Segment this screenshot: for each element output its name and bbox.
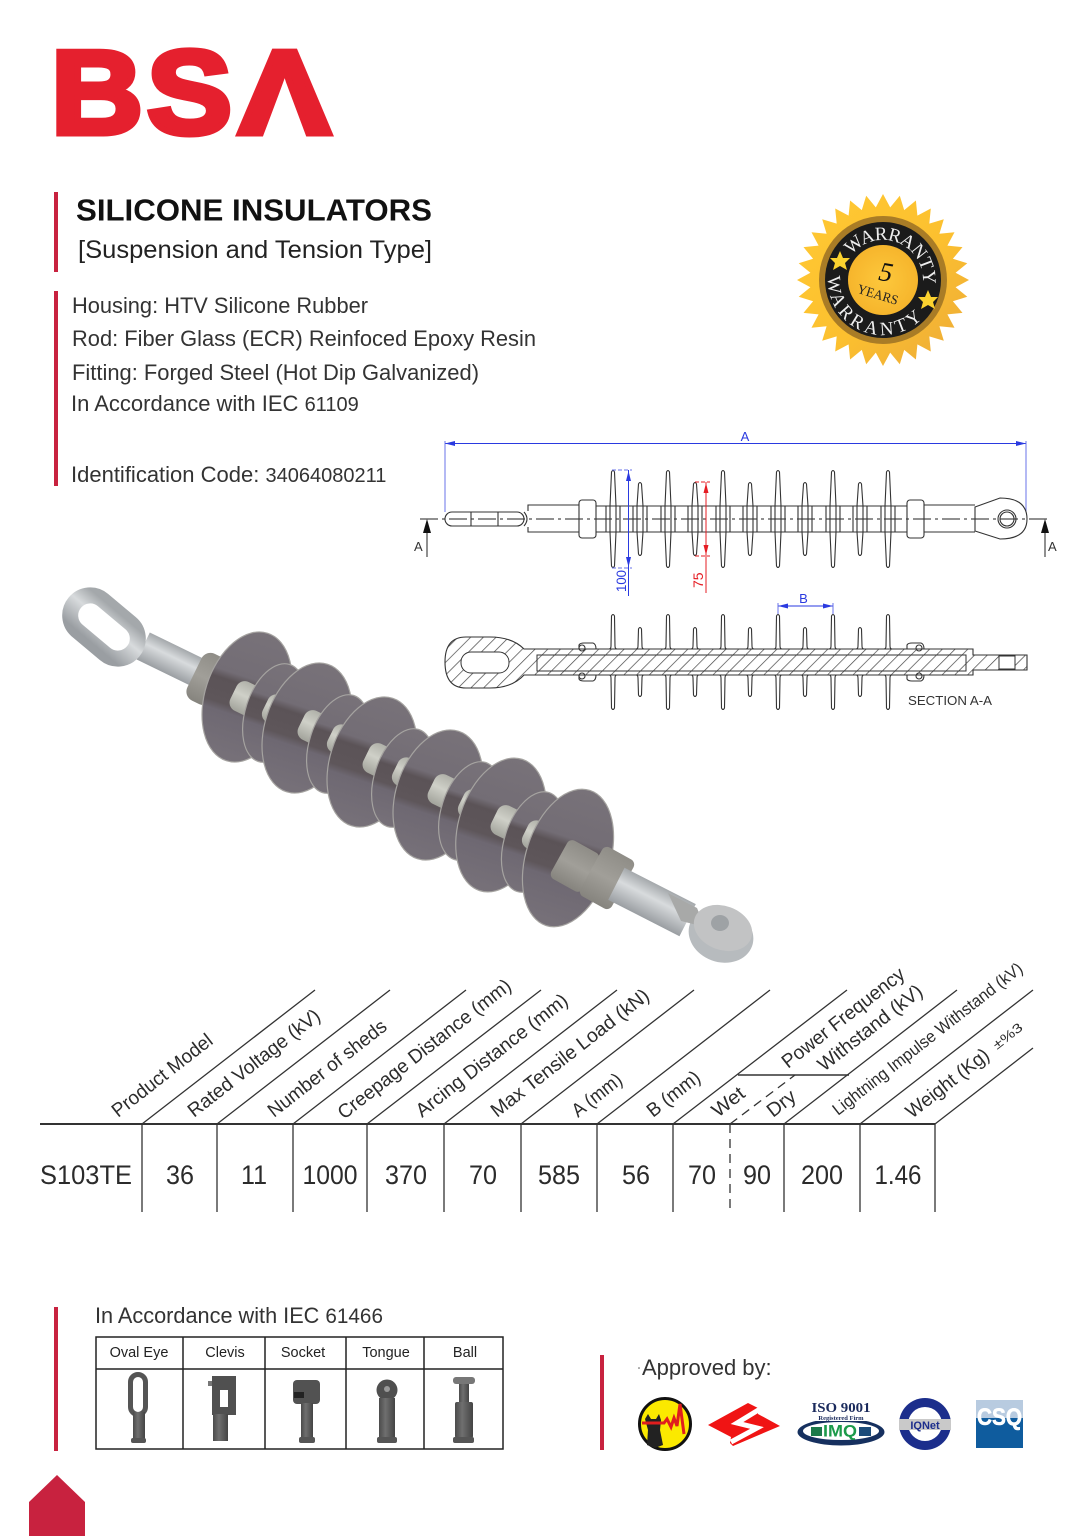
rotated column headers: Power Frequency	[778, 963, 909, 1073]
fittings labels: Oval Eye	[110, 1345, 168, 1361]
fittings labels: Tongue	[362, 1345, 410, 1361]
end collar and clevis eye	[549, 838, 761, 972]
rotated column headers: ±%3	[990, 1020, 1026, 1052]
warranty seal badge: WARRANTY	[828, 275, 920, 336]
fittings labels	[110, 1345, 477, 1361]
dimension 75: 75	[690, 572, 706, 588]
specification text block: Identification Code: 34064080211	[71, 462, 386, 487]
logo: IQNet: IQNet	[910, 1420, 940, 1432]
rotated column headers: Arcing Distance (mm)	[412, 989, 572, 1122]
fittings labels: Clevis	[205, 1345, 245, 1361]
technical drawing: side view	[414, 429, 1057, 596]
rotated column headers: Creepage Distance (mm)	[334, 975, 516, 1124]
logo: BSA: Λ	[239, 26, 330, 160]
page marker: red house shape	[29, 1475, 85, 1536]
table values	[40, 1160, 922, 1190]
heading block	[54, 192, 432, 272]
panel: fitting types	[54, 1303, 503, 1451]
logo: IQNet	[899, 1398, 951, 1450]
table values: S103TE	[40, 1160, 132, 1190]
heading block: [Suspension and Tension Type]	[78, 236, 432, 264]
section arrows A: A	[1048, 539, 1057, 554]
technical drawing: section A-A	[445, 591, 1027, 710]
warranty seal badge: YEARS	[856, 281, 900, 308]
warranty seal badge: 5	[877, 256, 895, 288]
rotated column headers: B (mm)	[643, 1066, 705, 1122]
panel: approvals	[600, 1355, 1023, 1450]
icon: clevis	[208, 1376, 236, 1441]
warranty seal badge: WARRANTY	[842, 228, 936, 284]
logo: ISO 9001 IMQ: ISO 9001	[812, 1401, 870, 1416]
table values: 585	[538, 1160, 580, 1190]
dimension B: B	[799, 591, 808, 606]
logo: CSQ: CSQ	[977, 1404, 1022, 1431]
logo: BSA: S	[147, 26, 232, 160]
icon: tongue	[376, 1380, 398, 1443]
dimension A	[445, 429, 1026, 512]
specification table	[40, 959, 1033, 1212]
rotated column headers: Withstand (kV)	[814, 980, 927, 1076]
sheds and core	[186, 620, 630, 939]
specification text block: Housing: HTV Silicone Rubber	[72, 293, 368, 318]
table values: 70	[469, 1160, 497, 1190]
table values: 1.46	[874, 1160, 922, 1190]
rotated column headers: A (mm)	[568, 1069, 627, 1122]
panel: fitting types: In Accordance with IEC 61466	[95, 1303, 383, 1328]
dimension A: A	[741, 429, 750, 444]
icon: ball	[453, 1377, 475, 1443]
rotated column headers: Weight (Kg)	[902, 1044, 994, 1123]
rotated column headers: Lightning Impulse Withstand (kV)	[829, 959, 1026, 1119]
dimension 100	[612, 470, 632, 596]
rotated column headers: Product Model	[108, 1029, 217, 1122]
fittings table grid	[96, 1337, 503, 1449]
icon: oval eye	[130, 1374, 146, 1443]
table values: 1000	[302, 1160, 358, 1190]
table values: 70	[688, 1160, 716, 1190]
warranty seal badge	[797, 194, 969, 366]
rotated column headers: Dry	[763, 1085, 801, 1122]
logo: ISO 9001 IMQ	[798, 1401, 884, 1446]
logo: CSQ	[976, 1400, 1023, 1448]
insulator outline	[420, 470, 1051, 568]
fittings labels: Socket	[281, 1345, 325, 1361]
product photo: silicone insulator	[62, 587, 761, 972]
rotated column headers	[108, 959, 1026, 1124]
rotated column headers: Wet	[708, 1082, 750, 1122]
oval eye fitting	[62, 587, 231, 709]
specification text block: Rod: Fiber Glass (ECR) Reinfoced Epoxy Resin	[72, 326, 536, 351]
section label: SECTION A-A	[908, 693, 992, 708]
table values: 11	[241, 1160, 267, 1190]
specification text block: Fitting: Forged Steel (Hot Dip Galvanized)	[72, 360, 479, 385]
logo: ISO 9001 IMQ: IMQ	[823, 1422, 857, 1440]
dimension 75	[690, 482, 710, 593]
section arrows A	[414, 519, 1057, 557]
rotated column headers: Max Tensile Load (kN)	[487, 985, 654, 1122]
heading block: SILICONE INSULATORS	[76, 192, 432, 228]
logo: yellow lightning	[640, 1398, 690, 1450]
logo: red S diamond	[708, 1403, 780, 1446]
logo: BSA: B	[51, 26, 143, 160]
table grid	[40, 990, 1033, 1212]
fittings labels: Ball	[453, 1345, 477, 1361]
table values: 56	[622, 1160, 650, 1190]
logo: ISO 9001 IMQ: Registered Firm	[818, 1415, 864, 1422]
table values: 90	[743, 1160, 771, 1190]
rotated column headers: Number of sheds	[264, 1015, 392, 1122]
logo: BSA	[51, 26, 330, 160]
dimension B	[778, 591, 833, 614]
section arrows A: A	[414, 539, 423, 554]
table values: 200	[801, 1160, 843, 1190]
dimension 100: 100	[613, 570, 629, 592]
table values: 36	[166, 1160, 194, 1190]
table values: 370	[385, 1160, 427, 1190]
icon: socket	[293, 1380, 320, 1443]
specification text block: In Accordance with IEC 61109	[71, 391, 359, 416]
panel: approvals: Approved by:	[642, 1355, 772, 1380]
rotated column headers: Rated Voltage (kV)	[184, 1005, 325, 1122]
specification text block	[54, 291, 536, 487]
